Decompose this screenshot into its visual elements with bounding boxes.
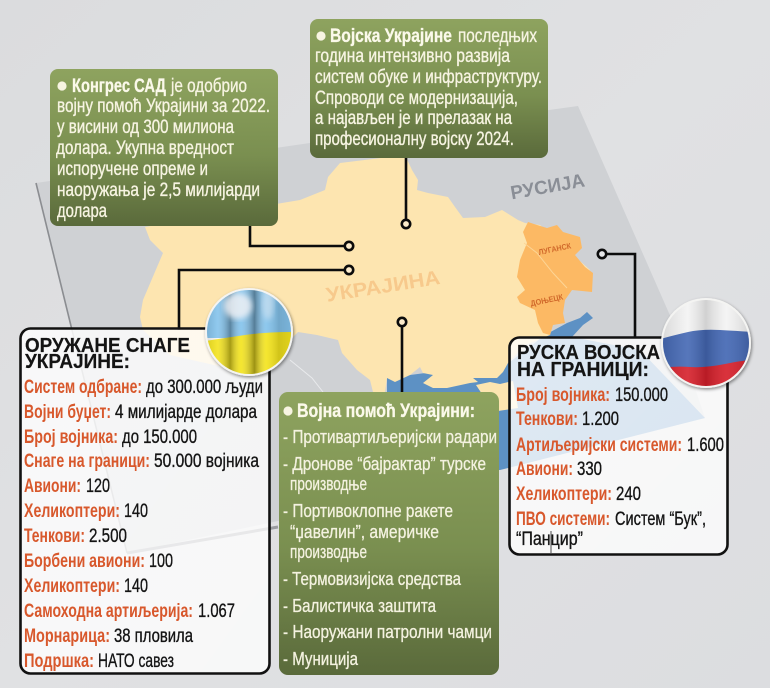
stats list: Russia: 150.000 [615,384,668,406]
stats list: Ukraine: Број војника: [24,426,118,448]
stats list: Ukraine: Снаге на граници: [24,450,150,472]
heading: armed forces of Ukraine: УКРАЈИНЕ: [25,351,130,373]
callout: Ukrainian army: Спроводи се модернизација, [315,88,518,109]
callout: US Congress: војну помоћ Украјини за 2022. [57,96,270,117]
stats list: Ukraine: до 150.000 [122,426,197,448]
stats list: Russia [516,384,724,553]
stats list: Ukraine: Тенкови: [24,525,85,547]
aid list: - Наоружани патролни чамци [283,621,492,642]
stats list: Ukraine: Морнарица: [24,625,110,647]
stats list: Ukraine: Систем одбране: [24,376,142,398]
stats list: Ukraine: Хеликоптери: [24,575,120,597]
callout: US Congress: Конгрес САД [72,76,166,97]
connector: Russian forces panel [598,250,635,338]
aid list: “џавелин”, америчке [290,521,439,542]
callout: US Congress: долара. Укупна вредност [56,138,234,159]
stats list: Russia: Број војника: [516,384,610,406]
heading: Russian army on the border: НА ГРАНИЦИ: [517,359,649,381]
aid list: - Муниција [283,648,359,669]
stats list: Ukraine: 50.000 војника [154,450,259,472]
callout: Ukrainian army: година интензивно развија [315,46,510,67]
label: Russia: РУСИЈА [509,170,587,204]
aid list [283,426,497,669]
stats list: Ukraine: 120 [86,475,110,497]
Moldova border line [290,360,323,392]
aid list: - Термовизијска средства [283,568,462,589]
stats list: Ukraine: 100 [149,550,173,572]
aid list: - Противартиљеријски радари [283,426,497,447]
heading: armed forces of Ukraine: ОРУЖАНЕ СНАГЕ [25,335,190,357]
icon: Ukrainian flag badge [205,288,295,378]
callout: US Congress: испоручене опреме и [57,159,208,180]
stats list: Ukraine: до 300.000 људи [146,376,263,398]
connector: Ukrainian forces panel [179,266,353,330]
panel: armed forces of Ukraine [20,328,270,674]
callout: US Congress: је одобрио [170,76,247,97]
panel: military aid to Ukraine [279,392,499,675]
label: Luhansk: ЛУГАНСК [538,241,572,257]
stats list: Ukraine: 4 милијарде долара [115,401,257,423]
panel: Russian army on the border [510,338,728,554]
stats list: Russia: Систем “Бук”, [615,508,706,530]
Black Sea and Sea of Azov [387,312,705,470]
callout: Ukrainian army: Војска Украјине [330,26,452,47]
map of Ukraine and neighbours [36,106,705,553]
callout: Ukrainian army [310,19,548,158]
stats list: Russia: ПВО системи: [516,508,610,530]
aid list: - Портивоклопне ракете [283,500,453,521]
aid list: производње [290,541,367,562]
stats list: Russia: 240 [616,483,641,505]
map plane: neighbouring territory [36,106,705,553]
heading: Russian army on the border: РУСКА ВОЈСКА [517,342,660,364]
stats list: Ukraine: 1.067 [198,600,235,622]
heading: military aid to Ukraine: Војна помоћ Украјини: [297,401,475,422]
stats list: Ukraine: НАТО савез [98,650,174,672]
callout: Ukrainian army: систем обуке и инфраструктуру. [315,67,542,88]
heading: armed forces of Ukraine [25,335,190,373]
stats list: Russia: 330 [577,458,602,480]
callout: Ukrainian army: а најављен је и прелазак на [315,108,512,129]
label: Ukraine: УКРАЈИНА [325,267,442,307]
stats list: Ukraine: Борбени авиони: [24,550,145,572]
stats list: Russia: 1.200 [582,408,619,430]
stats list: Ukraine: 140 [124,575,148,597]
stats list: Ukraine: Подршка: [24,650,94,672]
callout: US Congress: долара [57,201,107,222]
connector: US Congress callout [250,224,353,250]
aid list: - Дронове “бајрактар” турске [283,453,486,474]
callout: US Congress: наоружања је 2,5 милијарди [57,180,260,201]
Luhansk and Donetsk regions [517,222,593,335]
aid list: производње [290,473,367,494]
connector: military aid panel [398,318,406,394]
stats list: Ukraine: Војни буџет: [24,401,111,423]
stats list: Russia: Авиони: [516,458,573,480]
Ukraine territory [140,155,590,392]
Crimea [476,381,518,411]
stats list: Ukraine: 2.500 [89,525,127,547]
stats list: Ukraine: 140 [124,500,148,522]
callout: US Congress: у висини од 300 милиона [57,117,234,138]
heading: Russian army on the border [517,342,660,381]
label: Donetsk: ДОЊЕЦК [530,293,564,308]
stats list: Russia: Артиљеријски системи: [516,434,682,456]
stats list: Ukraine: 38 пловила [114,625,193,647]
stats list: Russia: 1.600 [687,434,724,456]
aid list: - Балистичка заштита [283,595,437,616]
stats list: Ukraine: Самоходна артиљерија: [24,600,193,622]
stats list: Ukraine [24,376,263,672]
callout: US Congress [50,69,278,226]
stats list: Russia: Тенкови: [516,408,578,430]
stats list: Ukraine: Авиони: [24,475,81,497]
connector: Ukrainian army callout [402,156,410,228]
stats list: Russia: “Панцир” [516,528,583,550]
icon: Russian flag badge [660,298,752,390]
stats list: Russia: Хеликоптери: [516,483,612,505]
stats list: Ukraine: Хеликоптери: [24,500,120,522]
callout: Ukrainian army: професионалну војску 2024. [315,129,514,150]
callout: Ukrainian army: последњих [458,26,537,47]
